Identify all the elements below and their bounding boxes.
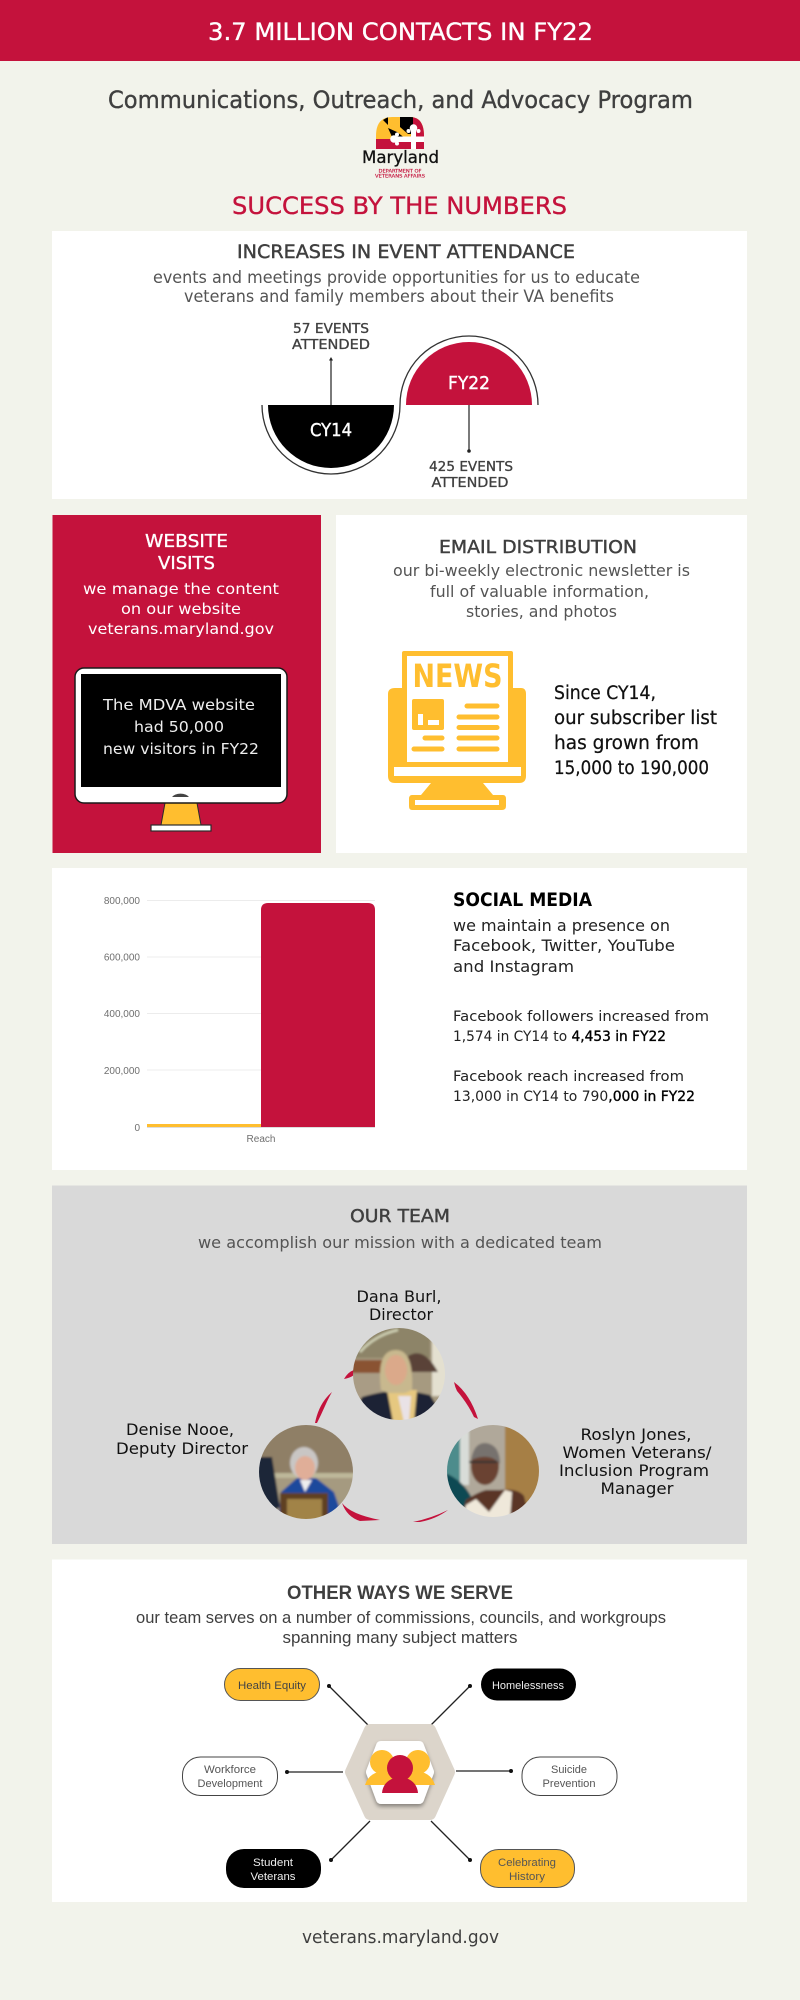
label: Roslyn Jones: Roslyn Jones,	[580, 1425, 692, 1444]
heading: our team: OUR TEAM	[350, 1207, 450, 1227]
text: Facebook statistics	[453, 1009, 709, 1105]
text: Facebook statistics: 13,000 in CY14 to 790,000 in FY22	[453, 1089, 695, 1105]
footer: website address: veterans.maryland.gov	[302, 1927, 499, 1948]
text: newsletter description: our bi-weekly electronic newsletter is	[393, 561, 690, 580]
icon: news on monitor	[388, 651, 526, 810]
label: Roslyn Jones	[559, 1425, 712, 1498]
heading: website visits: WEBSITE	[145, 532, 228, 552]
text: serve description: spanning many subject matters	[282, 1628, 518, 1647]
heading: website visits: VISITS	[158, 554, 215, 574]
chart: semicircle comparison: 425 EVENTS	[429, 460, 513, 475]
pill: Homelessness	[481, 1668, 576, 1700]
program heading: Communications, Outreach, and Advocacy Program	[108, 86, 693, 114]
icon: Maryland department logo: VETERANS AFFAIRS	[375, 174, 425, 180]
panel: social media	[52, 868, 747, 1170]
text: newsletter description: stories, and photos	[466, 602, 617, 621]
icon: desktop monitor: had 50,000	[134, 718, 224, 736]
pill: Suicide Prevention: Suicide	[551, 1764, 587, 1776]
connector lines	[285, 1684, 513, 1862]
text: events description	[153, 268, 640, 307]
panel: email distribution	[336, 515, 747, 853]
text: subscriber growth: 15,000 to 190,000	[554, 758, 709, 779]
heading: website visits	[145, 532, 228, 574]
icon: desktop monitor: new visitors in FY22	[103, 740, 259, 758]
text: Facebook statistics: Facebook reach increased from	[453, 1069, 684, 1085]
chart: semicircle comparison: ATTENDED	[292, 338, 370, 353]
pill: Suicide Prevention: Prevention	[542, 1778, 596, 1790]
pill: Homelessness: Homelessness	[492, 1680, 564, 1692]
pill: Student Veterans: Veterans	[250, 1871, 296, 1883]
label: Roslyn Jones: Inclusion Program	[559, 1461, 709, 1480]
text: newsletter description: full of valuable information,	[430, 582, 649, 601]
section heading: success by the numbers: SUCCESS BY THE NUMBERS	[232, 192, 567, 220]
bar chart: Facebook reach: Reach	[247, 1134, 275, 1145]
photo: Roslyn Jones	[445, 1423, 541, 1519]
pill: Health Equity	[224, 1668, 320, 1700]
pill: Student Veterans: Student	[253, 1857, 293, 1869]
text: website description	[83, 580, 279, 638]
label: Dana Burl: Dana Burl,	[356, 1287, 442, 1306]
text: serve description: our team serves on a number of commissions, councils, and workgroups	[136, 1608, 666, 1627]
pill: Student Veterans	[226, 1849, 321, 1888]
label: Roslyn Jones: Women Veterans/	[562, 1443, 712, 1462]
icon: news on monitor: NEWS	[412, 657, 502, 695]
bar chart: Facebook reach: 600,000	[104, 952, 140, 964]
pill: Celebrating History: History	[509, 1871, 546, 1883]
text: subscriber growth: our subscriber list	[554, 708, 717, 729]
panel: website visits	[52, 515, 321, 853]
text: events description: events and meetings provide opportunities for us to educate	[153, 268, 640, 288]
panel: our team	[52, 1186, 747, 1544]
pill: Suicide Prevention	[522, 1757, 617, 1796]
heading: increases in event attendance: INCREASES IN EVENT ATTENDANCE	[237, 241, 575, 263]
text: social media presence	[453, 916, 675, 976]
bar chart: Facebook reach	[104, 896, 375, 1145]
pill: Workforce Development: Development	[198, 1778, 262, 1790]
panel: other ways we serve	[52, 1560, 747, 1902]
pill: Celebrating History	[480, 1850, 574, 1888]
text: social media presence: we maintain a presence on	[453, 916, 670, 935]
pill: Workforce Development	[182, 1757, 278, 1796]
chart: semicircle comparison: CY14	[310, 420, 352, 441]
heading: social media: SOCIAL MEDIA	[453, 890, 593, 911]
pill: Health Equity: Health Equity	[238, 1680, 307, 1692]
bar chart: Facebook reach: 0	[134, 1123, 140, 1134]
heading: other ways we serve: OTHER WAYS WE SERVE	[287, 1583, 513, 1604]
text: social media presence: Facebook, Twitter, YouTube	[453, 936, 675, 955]
text: website description: on our website	[121, 600, 241, 618]
label: Denise Nooe: Denise Nooe,	[126, 1420, 234, 1439]
pill: Workforce Development: Workforce	[204, 1764, 256, 1776]
text: Facebook statistics: Facebook followers increased from	[453, 1009, 709, 1025]
icon: Maryland department logo: Maryland	[362, 148, 439, 168]
text: events description: veterans and family members about their VA benefits	[184, 287, 614, 307]
text: website description: we manage the content	[83, 580, 279, 598]
title banner	[0, 0, 800, 61]
icon: desktop monitor: The MDVA website	[102, 696, 255, 714]
icon: Maryland department logo	[362, 117, 439, 180]
bar chart: Facebook reach: 800,000	[104, 896, 140, 907]
label: Denise Nooe	[116, 1420, 248, 1458]
text: subscriber growth: Since CY14,	[554, 683, 656, 704]
chart: semicircle comparison: FY22	[448, 373, 490, 394]
chart: semicircle comparison	[262, 322, 538, 491]
panel: event attendance	[52, 231, 747, 499]
photo: Denise Nooe	[257, 1423, 355, 1521]
icon: desktop monitor	[75, 668, 287, 831]
text: Facebook statistics: 1,574 in CY14 to 4,453 in FY22	[453, 1029, 666, 1045]
bar chart: Facebook reach: 200,000	[104, 1066, 140, 1077]
photo: Dana Burl	[350, 1326, 447, 1422]
text: serve description	[136, 1608, 666, 1647]
pill: Celebrating History: Celebrating	[498, 1857, 556, 1869]
title banner: 3.7 MILLION CONTACTS IN FY22	[208, 18, 593, 46]
chart: semicircle comparison: 57 EVENTS	[293, 322, 369, 337]
bar chart: Facebook reach: 400,000	[104, 1009, 140, 1020]
chart: semicircle comparison: ATTENDED	[432, 476, 508, 491]
heading: email distribution: EMAIL DISTRIBUTION	[439, 538, 637, 558]
icon: Maryland department logo: DEPARTMENT OF	[378, 168, 422, 174]
label: Dana Burl: Director	[369, 1305, 433, 1324]
text: website description: veterans.maryland.gov	[88, 620, 274, 638]
label: Dana Burl	[356, 1287, 442, 1324]
label: Denise Nooe: Deputy Director	[116, 1439, 248, 1458]
red brush arcs	[315, 1370, 478, 1522]
text: subscriber growth: has grown from	[554, 733, 699, 754]
text: team description: we accomplish our mission with a dedicated team	[198, 1233, 602, 1252]
label: Roslyn Jones: Manager	[600, 1479, 674, 1498]
text: subscriber growth	[554, 683, 717, 779]
text: newsletter description	[393, 561, 690, 621]
text: social media presence: and Instagram	[453, 957, 574, 976]
icon: team hexagon	[351, 1730, 449, 1814]
